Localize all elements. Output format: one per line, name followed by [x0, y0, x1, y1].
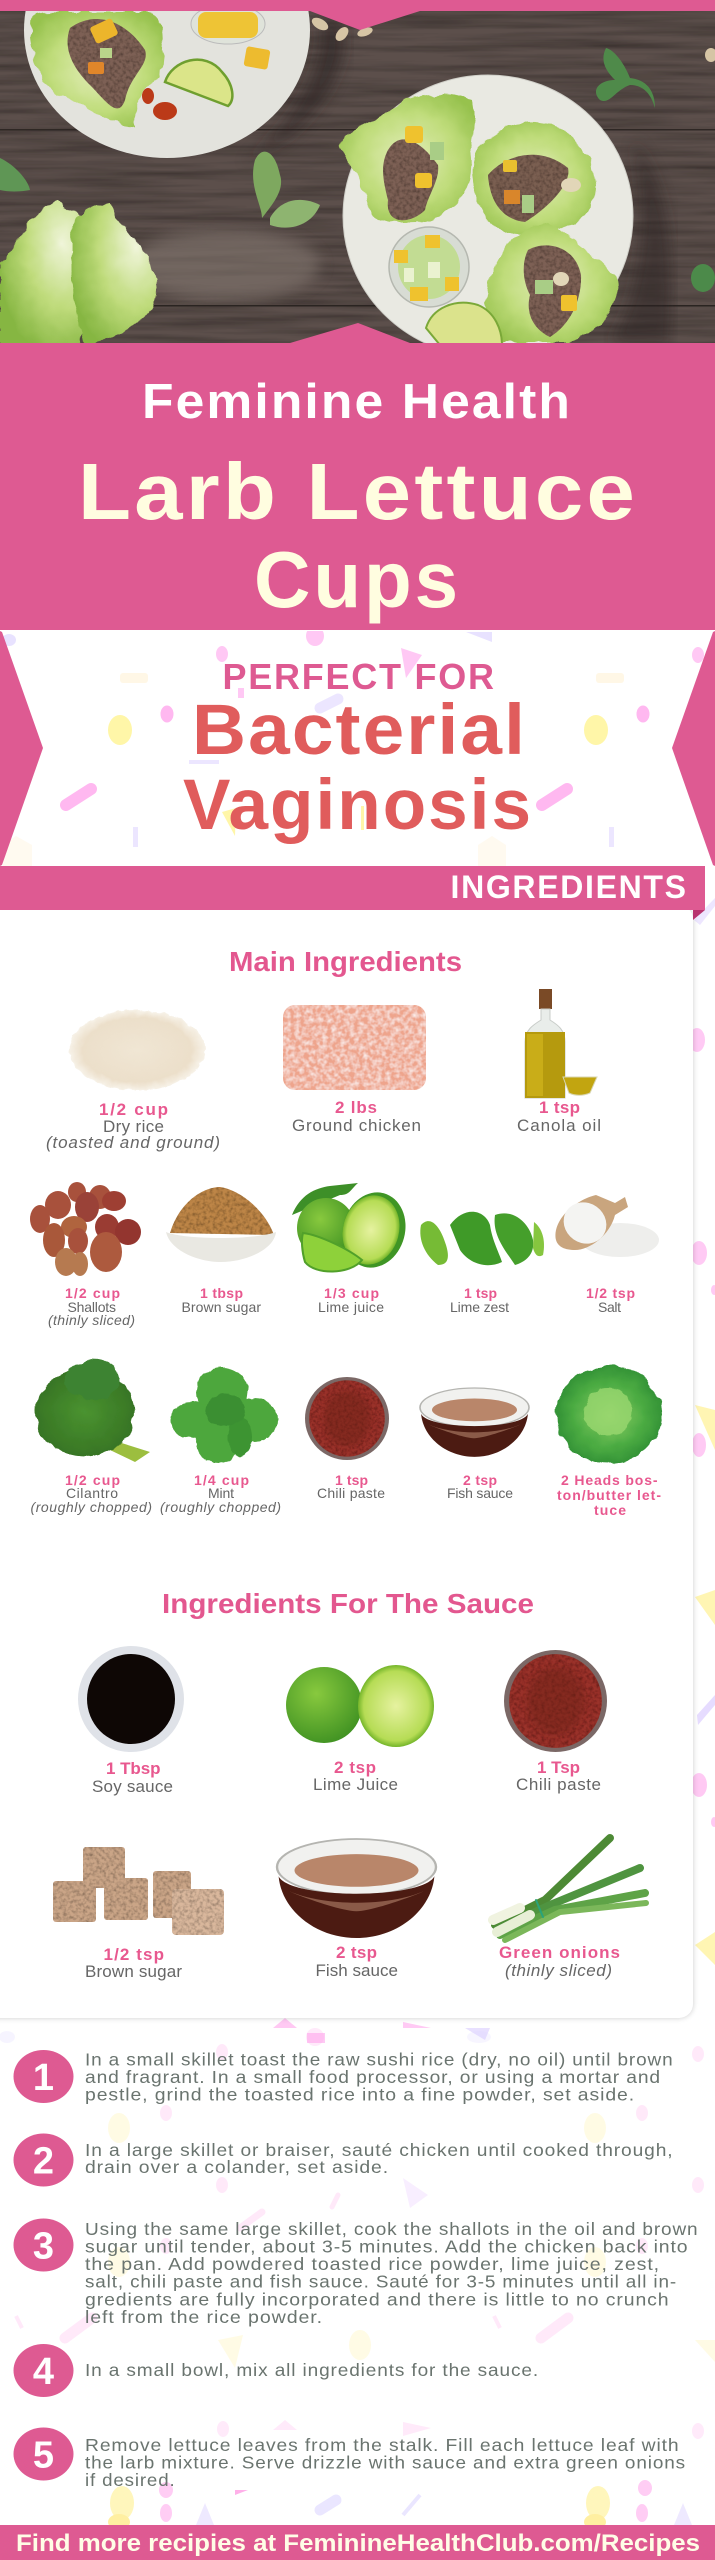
scattered peanuts: [310, 15, 715, 62]
label: chili paste: Chili paste: [317, 1485, 385, 1501]
label: fish sauce: Fish sauce: [316, 1961, 398, 1980]
footer bar: [0, 2525, 715, 2560]
lime wedge: [426, 303, 502, 345]
condition name: Vaginosis: [183, 766, 533, 845]
label: butter lettuce: ton/butter let-: [557, 1487, 661, 1503]
step 3 text: [85, 2219, 698, 2327]
label: lime zest: 1 tsp: [464, 1285, 497, 1301]
label: lime juice: 1/3 cup: [324, 1285, 379, 1301]
step number 5: [14, 2428, 74, 2480]
icon: rice pile: [69, 1010, 205, 1090]
label: mint: 1/4 cup: [194, 1472, 249, 1488]
label: brown sugar: [85, 1945, 182, 1981]
step 4 text: In a small bowl, mix all ingredients for the sauce.: [85, 2360, 539, 2380]
background confetti pattern: [0, 898, 715, 2530]
label: lime juice: 2 tsp: [334, 1758, 376, 1777]
ingredient: chili paste: [305, 1377, 389, 1501]
ingredient: canola oil: [517, 989, 601, 1135]
label: ground chicken: [292, 1098, 421, 1135]
heading: main ingredients: Main Ingredients: [229, 946, 462, 977]
step 3 text: left from the rice powder.: [85, 2307, 323, 2327]
step 3 text: salt, chili paste and fish sauce. Sauté for 3-5 minutes until all in-: [85, 2272, 677, 2292]
step 3 text: sugar until tender, about 3-5 minutes. Add the chicken back into: [85, 2236, 688, 2256]
label: lime juice: [313, 1758, 398, 1794]
label: mint: Mint: [208, 1485, 234, 1501]
label: fish sauce: Fish sauce: [447, 1485, 513, 1501]
lettuce cup B: [473, 121, 596, 234]
label: butter lettuce: tuce: [594, 1502, 626, 1518]
label: butter lettuce: 2 Heads bos-: [561, 1472, 658, 1488]
icon: oil bottle and glass: [525, 989, 597, 1098]
label: salt: [586, 1285, 635, 1315]
label: fish sauce: 2 tsp: [336, 1943, 377, 1962]
label: chili paste: Chili paste: [516, 1775, 601, 1794]
step 1: [14, 2050, 674, 2104]
step 2 text: [85, 2140, 674, 2177]
label: ground chicken: Ground chicken: [292, 1116, 421, 1135]
label: ground chicken: 2 lbs: [335, 1098, 377, 1117]
label: fish sauce: 2 tsp: [463, 1472, 497, 1488]
label: chili paste: [317, 1472, 385, 1501]
title band: [0, 323, 715, 630]
glass bowl with mango salsa: [389, 227, 469, 307]
step 5 text: Remove lettuce leaves from the stalk. Fill each lettuce leaf with: [85, 2435, 680, 2455]
label: green onions: [499, 1943, 620, 1980]
step 1 text: In a small skillet toast the raw sushi rice (dry, no oil) until brown: [85, 2050, 674, 2070]
ingredient: butter lettuce: [556, 1366, 662, 1518]
label: lime juice: Lime juice: [318, 1299, 384, 1315]
top pink banner notch: [0, 0, 715, 30]
ribbon left tail: [0, 631, 43, 866]
icon: head of lettuce: [556, 1366, 662, 1464]
label: green onions: (thinly sliced): [505, 1961, 612, 1980]
icon: cilantro bunch: [35, 1360, 150, 1462]
sauce: lime juice: [286, 1665, 434, 1794]
step number 1: [14, 2050, 74, 2103]
label: dry rice: (toasted and ground): [46, 1133, 220, 1152]
sauce: fish sauce: [277, 1839, 436, 1980]
ingredient: shallots: [30, 1182, 141, 1328]
step 3 text: the pan. Add powdered toasted rice powder, lime juice, zest,: [85, 2254, 660, 2274]
step number 4: 4: [33, 2351, 54, 2393]
icon: chili paste dish: [504, 1650, 607, 1752]
footer text: Find more recipies at FeminineHealthClub.com/Recipes: [16, 2530, 700, 2557]
ingredients card: [0, 905, 693, 2018]
ingredient: lime zest: [420, 1212, 544, 1315]
step 1 text: [85, 2050, 674, 2104]
condition name: [183, 691, 533, 845]
lettuce cup A: [340, 95, 475, 222]
perfect for: PERFECT FOR: [222, 656, 494, 697]
icon: ground chicken block: [283, 1005, 426, 1090]
sauce: brown sugar: [53, 1847, 224, 1981]
label: lime zest: [450, 1285, 509, 1315]
step 1 text: and fragrant. In a small food processor, or using a mortar and: [85, 2067, 661, 2087]
title: Larb Lettuce Cups: [78, 447, 638, 624]
step number 1: 1: [33, 2057, 54, 2099]
label: canola oil: Canola oil: [517, 1116, 601, 1135]
label: lime juice: [318, 1285, 384, 1315]
heading: ingredients for the sauce: Ingredients For The Sauce: [162, 1588, 534, 1619]
icon: green onions bunch: [493, 1838, 646, 1940]
loose lettuce leaves: [0, 200, 157, 345]
label: cilantro: [30, 1472, 152, 1515]
icon: fish sauce bowl: [277, 1839, 436, 1938]
label: soy sauce: Soy sauce: [92, 1777, 173, 1796]
label: dry rice: 1/2 cup: [99, 1100, 168, 1119]
ingredient: fish sauce: [420, 1388, 529, 1501]
ingredient: ground chicken: [283, 1005, 426, 1135]
label: lime zest: Lime zest: [450, 1299, 509, 1315]
step 3: [14, 2218, 698, 2327]
mint leaves: [0, 48, 715, 292]
ribbon: perfect for bacterial vaginosis: [0, 626, 715, 866]
icon: chili paste dish: [305, 1377, 389, 1460]
wooden table: [0, 11, 715, 343]
step number 2: 2: [33, 2140, 54, 2182]
label: brown sugar: Brown sugar: [85, 1962, 182, 1981]
plate with lettuce cup, top left: [24, 0, 310, 158]
label: shallots: [48, 1285, 135, 1328]
step number 2: [14, 2134, 74, 2186]
icon: soy sauce dish: [78, 1646, 184, 1752]
label: lime juice: Lime Juice: [313, 1775, 398, 1794]
label: cilantro: Cilantro: [66, 1485, 118, 1501]
icon: limes: [292, 1183, 414, 1275]
icon: mint leaves: [170, 1367, 277, 1463]
sauce: chili paste: [504, 1650, 607, 1794]
label: green onions: Green onions: [499, 1943, 620, 1962]
step number 3: 3: [33, 2226, 54, 2268]
label: mint: [160, 1472, 281, 1515]
step 2 text: In a large skillet or braiser, sauté chicken until cooked through,: [85, 2140, 674, 2160]
step 3 text: gredients are fully incorporated and there is little to no crunch: [85, 2290, 670, 2310]
label: chili paste: 1 tsp: [335, 1472, 368, 1488]
label: fish sauce: [447, 1472, 513, 1501]
icon: shallots: [30, 1182, 141, 1276]
label: chili paste: [516, 1758, 601, 1794]
icon: fish sauce bowl: [420, 1388, 529, 1457]
ingredient: dry rice: [46, 1010, 220, 1152]
icon: lime peel spiral: [420, 1212, 544, 1265]
ingredient: cilantro: [30, 1360, 152, 1515]
icon: bowl of brown sugar: [166, 1187, 276, 1262]
sauce: soy sauce: [78, 1646, 184, 1796]
ingredient: mint: [160, 1367, 281, 1515]
ribbon confetti: [2, 626, 704, 866]
big plate with three lettuce cups: [340, 75, 633, 357]
ingredient: brown sugar: [166, 1187, 276, 1315]
label: shallots: Shallots: [68, 1299, 116, 1315]
label: canola oil: [517, 1098, 601, 1135]
label: cilantro: 1/2 cup: [65, 1472, 120, 1488]
label: shallots: (thinly sliced): [48, 1312, 135, 1328]
icon: lime whole and half: [286, 1665, 434, 1747]
label: shallots: 1/2 cup: [65, 1285, 120, 1301]
label: brown sugar: 1 tbsp: [200, 1285, 243, 1301]
label: canola oil: 1 tsp: [539, 1098, 580, 1117]
label: brown sugar: [182, 1285, 261, 1315]
label: soy sauce: [92, 1759, 173, 1796]
label: fish sauce: [316, 1943, 398, 1980]
ribbon right tail: [672, 631, 715, 866]
step number 3: [14, 2218, 74, 2272]
step 2 text: drain over a colander, set aside.: [85, 2157, 389, 2177]
label: salt: 1/2 tsp: [586, 1285, 635, 1301]
label: brown sugar: 1/2 tsp: [104, 1945, 164, 1964]
label: soy sauce: 1 Tbsp: [106, 1759, 160, 1778]
sauce: green onions: [493, 1838, 646, 1980]
label: dry rice: Dry rice: [103, 1117, 164, 1136]
step 3 text: Using the same large skillet, cook the shallots in the oil and brown: [85, 2219, 698, 2239]
heading: ingredients: INGREDIENTS: [450, 869, 686, 905]
step 5 text: the larb mixture. Serve drizzle with sauce and extra green onions: [85, 2452, 686, 2472]
step 4: [14, 2344, 539, 2397]
step number 4: [14, 2344, 74, 2397]
step 5 text: if desired.: [85, 2470, 176, 2490]
ingredient: salt: [556, 1194, 659, 1315]
ingredients header bar: [0, 866, 705, 920]
icon: sugar cubes: [53, 1847, 224, 1935]
ingredient: lime juice: [292, 1183, 414, 1315]
condition name: Bacterial: [192, 691, 527, 770]
title: Larb Lettuce Cups: Larb Lettuce: [78, 447, 638, 536]
lettuce cup C: [486, 222, 617, 342]
label: mint: (roughly chopped): [160, 1499, 281, 1515]
step 2: [14, 2134, 674, 2186]
step 5 text: [85, 2435, 686, 2490]
hero photo: lettuce cups on wooden table: [0, 0, 715, 357]
label: chili paste: 1 Tsp: [537, 1758, 580, 1777]
icon: wooden scoop with salt: [556, 1194, 659, 1257]
label: butter lettuce: [557, 1472, 661, 1518]
label: salt: Salt: [598, 1299, 621, 1315]
label: dry rice: [46, 1100, 220, 1152]
step number 5: 5: [33, 2434, 54, 2476]
subtitle: Feminine Health: Feminine Health: [142, 375, 572, 429]
label: cilantro: (roughly chopped): [30, 1499, 152, 1515]
title: Larb Lettuce Cups: Cups: [254, 535, 461, 624]
label: brown sugar: Brown sugar: [182, 1299, 261, 1315]
step 1 text: pestle, grind the toasted rice into a fine powder, set aside.: [85, 2084, 635, 2104]
step 5: [14, 2428, 686, 2490]
